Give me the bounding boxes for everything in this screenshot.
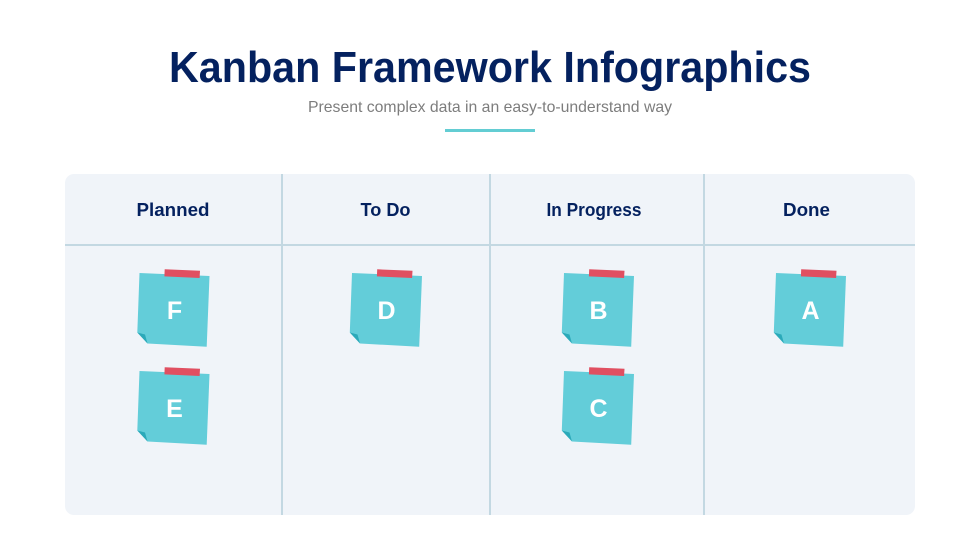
- sticky note: D: D: [377, 297, 396, 325]
- panel: kanban board: [65, 174, 915, 515]
- sticky note: A: A: [801, 297, 820, 325]
- heading: Planned: Planned: [136, 199, 210, 220]
- sticky note: E: E: [166, 395, 183, 423]
- sticky note: E: [137, 367, 210, 445]
- sticky note: B: B: [589, 297, 608, 325]
- heading: To Do: To Do: [360, 199, 410, 220]
- heading: In Progress: In Progress: [546, 199, 642, 220]
- accent bar: [445, 129, 535, 132]
- heading: Done: Done: [783, 199, 830, 220]
- sticky note: C: C: [589, 395, 608, 423]
- sticky note: C: [562, 367, 634, 445]
- subtitle: Present complex data in an easy-to-understand way: [308, 99, 672, 116]
- sticky note: B: [562, 269, 634, 347]
- sticky note: D: [350, 269, 422, 347]
- sticky note: F: F: [167, 297, 182, 325]
- sticky note: F: [137, 269, 210, 347]
- title: Kanban Framework Infographics: [169, 43, 811, 92]
- sticky note: A: [774, 269, 846, 347]
